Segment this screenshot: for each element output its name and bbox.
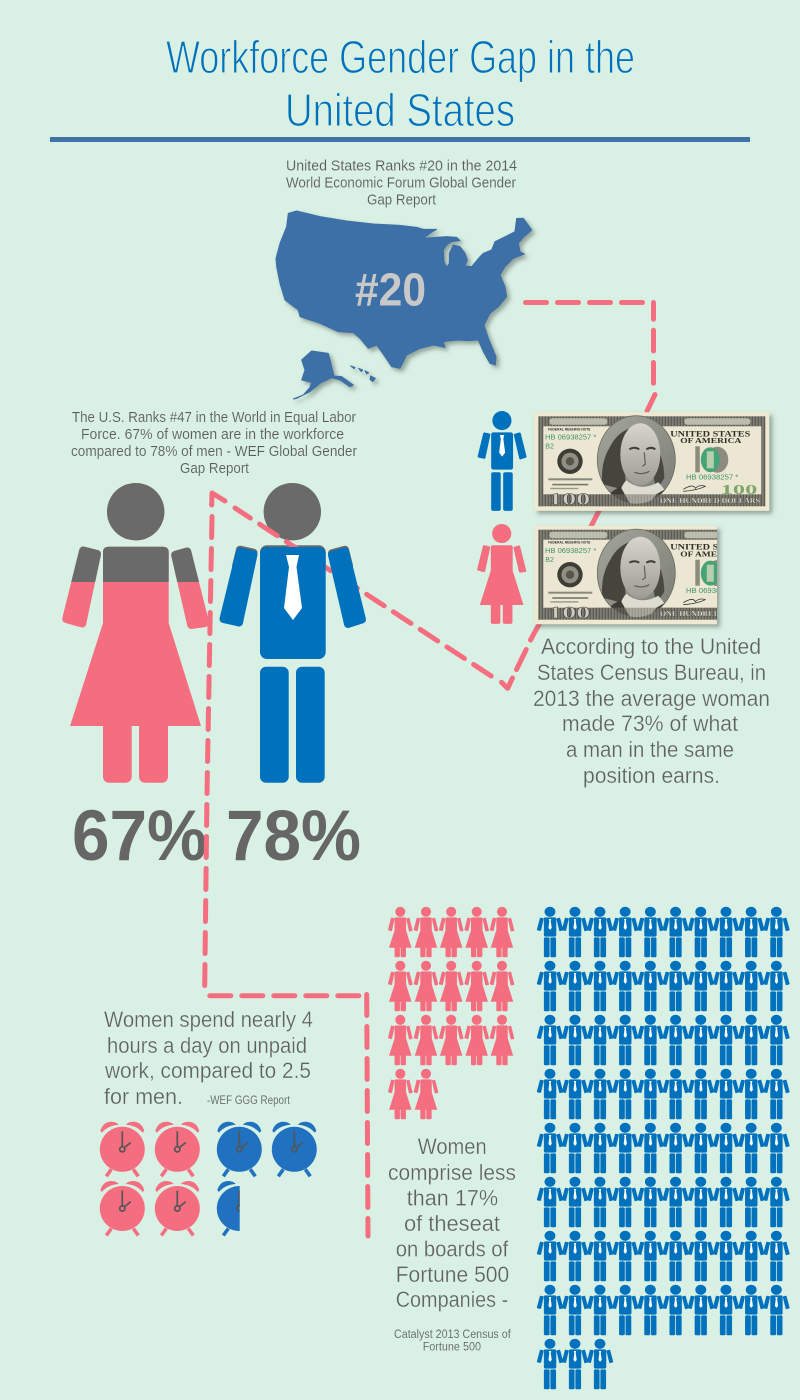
text: labor force ranking: Gap Report (180, 460, 250, 477)
text: census wage gap: a man in the same (566, 737, 734, 762)
text: labor force ranking (71, 409, 357, 477)
text: unpaid work (104, 1007, 313, 1109)
pictogram: women on boards (389, 907, 514, 1119)
text: census wage gap: 2013 the average woman (533, 686, 770, 711)
text: global ranking (286, 158, 517, 208)
text: unpaid work: work, compared to 2.5 (104, 1058, 311, 1083)
map rank number: #20 (355, 264, 426, 316)
text: unpaid work: Women spend nearly 4 (104, 1007, 313, 1032)
text: Catalyst source: Fortune 500 (423, 1342, 481, 1354)
text: women on boards: comprise less (388, 1160, 516, 1185)
title: Workforce Gender Gap in the (166, 31, 635, 83)
text: census wage gap: position earns. (583, 763, 720, 788)
text: women on boards: of theseat (404, 1211, 501, 1236)
text: women on boards: Women (418, 1134, 487, 1159)
small male figure (479, 411, 525, 511)
text: labor force ranking: The U.S. Ranks #47 in the World in Equal Labor (72, 409, 356, 426)
text: women on boards: Fortune 500 (396, 1262, 509, 1287)
title: United States (285, 84, 515, 136)
title (166, 31, 635, 136)
clocks: men's 2.5 hours (217, 1122, 317, 1236)
text: census wage gap: made 73% of what (562, 711, 739, 736)
small female figure (479, 524, 525, 624)
dollar bill: men's earnings (534, 412, 769, 511)
text: Catalyst source (394, 1329, 511, 1354)
text: global ranking: World Economic Forum Global Gender (286, 174, 516, 192)
big male figure: head and shoulders (232, 483, 354, 566)
text: women on boards: Companies - (396, 1287, 508, 1312)
big female figure: 67% filled (66, 483, 205, 783)
big male figure: body (224, 547, 362, 783)
text: Catalyst source: Catalyst 2013 Census of (394, 1329, 511, 1341)
text: unpaid work: hours a day on unpaid (107, 1033, 307, 1058)
text: unpaid work: -WEF GGG Report (207, 1093, 291, 1107)
dashed connector line (205, 302, 655, 1236)
text: women on boards (388, 1134, 516, 1312)
title rule (50, 137, 750, 142)
text: labor force ranking: Force. 67% of women are in the workforce (81, 426, 344, 443)
text: women on boards: than 17% (407, 1186, 498, 1211)
statistic: 67%: 67% (72, 797, 207, 876)
clocks: women's 4 hours (100, 1122, 200, 1236)
pictogram: men on boards (538, 907, 789, 1389)
map: United States (276, 211, 532, 399)
text: global ranking: United States Ranks #20 in the 2014 (286, 158, 517, 174)
text: unpaid work: for men. (104, 1084, 183, 1109)
text: global ranking: Gap Report (367, 192, 437, 208)
text: labor force ranking: compared to 78% of men - WEF Global Gender (71, 443, 357, 460)
text: women on boards: on boards of (396, 1237, 509, 1262)
statistic: 78%: 78% (226, 797, 361, 876)
text: census wage gap: States Census Bureau, in (537, 660, 766, 685)
text: census wage gap: According to the United (541, 634, 761, 659)
text: census wage gap (533, 634, 770, 788)
dollar bill: women's earnings, 73% (534, 526, 722, 630)
